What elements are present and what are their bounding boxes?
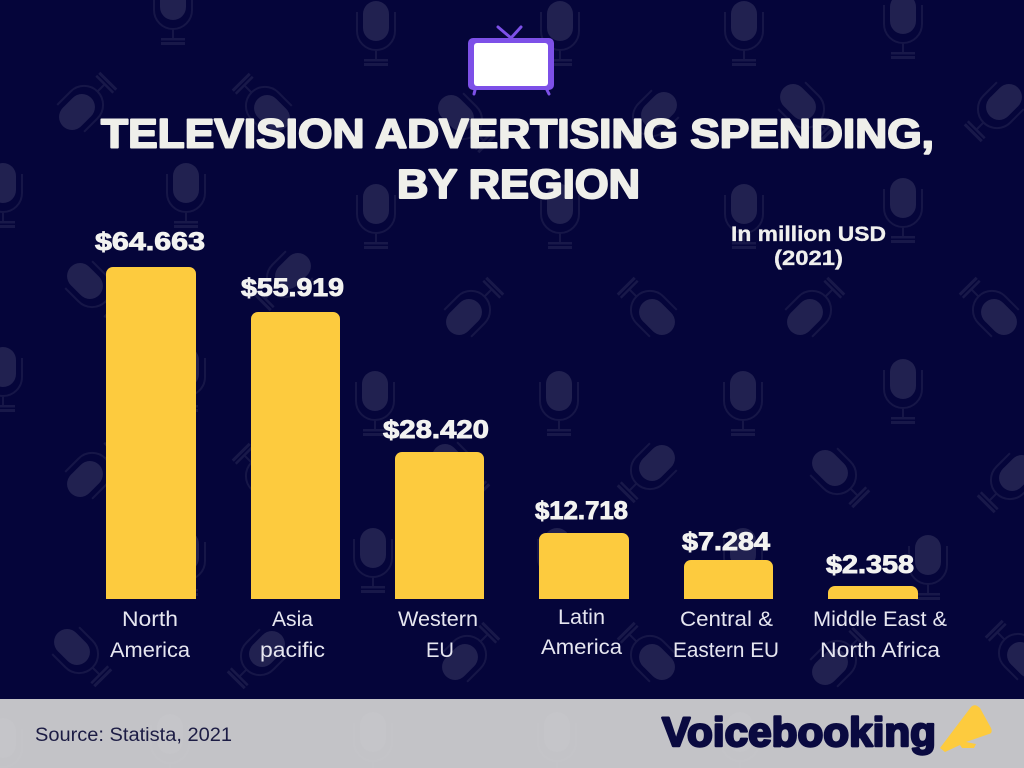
icon: television bbox=[468, 27, 554, 94]
bar: Middle East and North Africa: Middle East & bbox=[813, 608, 947, 631]
bar: Middle East and North Africa: $2.358 bbox=[826, 551, 914, 579]
unit note: (2021) bbox=[774, 247, 843, 270]
unit note: In million USD bbox=[731, 223, 886, 246]
logo: Voicebooking: Voicebooking bbox=[662, 709, 936, 755]
bar: North America: $64.663 bbox=[95, 228, 205, 256]
bar: Western EU: Western bbox=[398, 608, 478, 631]
bar: Western EU: $28.420 bbox=[383, 416, 489, 444]
source note: Source: Statista, 2021 bbox=[35, 725, 232, 746]
bar: Central and Eastern EU: Eastern EU bbox=[673, 639, 779, 662]
bar: Asia pacific: pacific bbox=[260, 639, 325, 662]
bar: Asia pacific bbox=[241, 274, 344, 662]
bar chart bbox=[95, 228, 947, 662]
title: TELEVISION ADVERTISING SPENDING, bbox=[101, 110, 934, 156]
title: BY REGION bbox=[397, 161, 640, 207]
bar: Asia pacific: Asia bbox=[272, 608, 313, 631]
title bbox=[101, 110, 934, 207]
icon: megaphone bbox=[940, 705, 992, 752]
bar: Latin America: America bbox=[541, 636, 622, 659]
bar: Western EU bbox=[383, 416, 489, 662]
bar: Western EU: EU bbox=[426, 639, 454, 662]
bar: North America: North bbox=[122, 608, 178, 631]
bar: North America: America bbox=[110, 639, 190, 662]
bar: Central and Eastern EU: Central & bbox=[680, 608, 773, 631]
footer band bbox=[0, 699, 1024, 768]
unit note bbox=[731, 223, 886, 270]
bar: Central and Eastern EU bbox=[673, 528, 779, 662]
bar: Middle East and North Africa: North Africa bbox=[820, 639, 940, 662]
bar: North America bbox=[95, 228, 205, 662]
bar: Latin America: Latin bbox=[558, 606, 605, 629]
bar: Middle East and North Africa bbox=[813, 551, 947, 662]
bar: Latin America: $12.718 bbox=[535, 497, 628, 525]
bar: Latin America bbox=[535, 497, 629, 659]
bar: Central and Eastern EU: $7.284 bbox=[682, 528, 770, 556]
bar: Asia pacific: $55.919 bbox=[241, 274, 344, 302]
